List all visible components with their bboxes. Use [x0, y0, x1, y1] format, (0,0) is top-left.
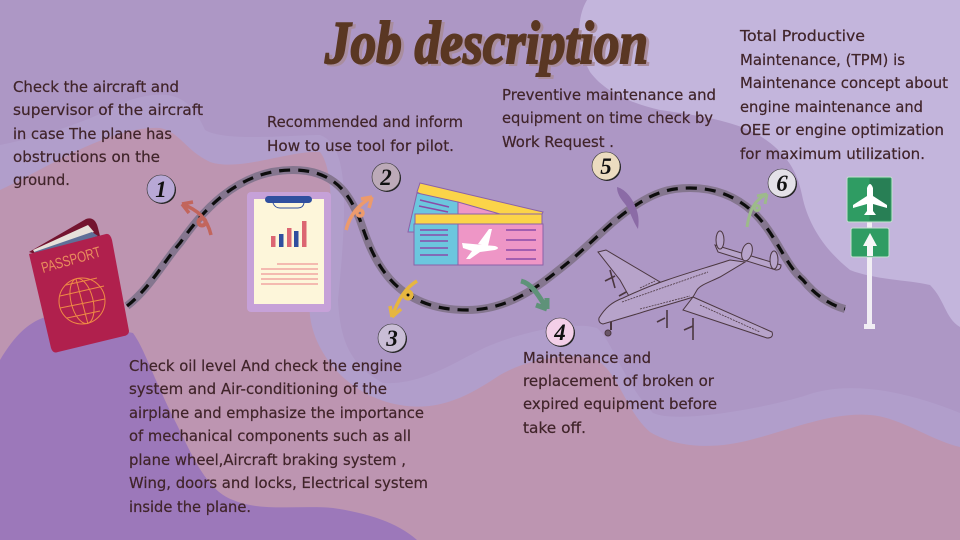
icon: passport: PASSPORT — [39, 244, 103, 277]
step badge 5 — [592, 152, 621, 181]
text: step 3: plane wheel,Aircraft braking system , — [129, 451, 406, 469]
step badge 3 — [378, 324, 407, 353]
arrow 4 — [521, 281, 547, 309]
text: step 3: Check oil level And check the engine — [129, 357, 402, 375]
text: step 4: expired equipment before — [523, 395, 717, 413]
text: step 1: obstructions on the — [13, 148, 160, 166]
step badge 3: 3 — [385, 326, 398, 351]
title: Job description — [324, 10, 648, 76]
step badge 1: 1 — [155, 177, 167, 202]
text: step 1: ground. — [13, 171, 70, 189]
step badge 2: 2 — [379, 165, 392, 190]
text: step 6 — [739, 27, 948, 163]
text: step 2 — [267, 113, 463, 155]
bar chart — [271, 221, 306, 247]
step badge 4 — [546, 318, 575, 347]
step badge 1 — [147, 175, 176, 204]
text: step 6: Maintenance concept about — [740, 74, 948, 92]
step badge 5: 5 — [600, 154, 612, 179]
step badge 4: 4 — [553, 320, 566, 345]
icon: clipboard chart — [247, 192, 331, 312]
icon: passport — [29, 218, 129, 352]
text: step 5: Preventive maintenance and — [502, 86, 716, 104]
text: step 1: Check the aircraft and — [13, 78, 179, 96]
step badge 2 — [372, 163, 401, 192]
icon: boarding tickets — [408, 183, 543, 265]
text: step 3: system and Air-conditioning of the — [129, 380, 387, 398]
text: step 2: How to use tool for pilot. — [267, 137, 454, 155]
title: Job description — [327, 12, 651, 78]
step badge 6 — [768, 169, 797, 198]
text: step 6: Total Productive — [739, 27, 865, 45]
arrow 3 — [390, 281, 417, 317]
text: step 4: take off. — [523, 419, 586, 437]
text: step 5: Work Request . — [502, 133, 614, 151]
arrow 5 — [617, 187, 639, 229]
text: step 4: replacement of broken or — [523, 372, 715, 390]
text: step 6: for maximum utilization. — [740, 145, 925, 163]
text: step 6: OEE or engine optimization — [740, 121, 944, 139]
text: step 3: inside the plane. — [129, 498, 251, 516]
text: step 1: in case The plane has — [13, 125, 172, 143]
step badge 6: 6 — [776, 171, 788, 196]
text: step 6: engine maintenance and — [740, 98, 923, 116]
text: step 1: supervisor of the aircraft — [13, 101, 203, 119]
text: step 5: equipment on time check by — [502, 109, 713, 127]
dashed route — [127, 170, 845, 310]
arrow 1 — [182, 202, 211, 235]
text: step 3: Wing, doors and locks, Electrical system — [129, 474, 428, 492]
arrow 2 — [346, 197, 372, 230]
text: step 3: of mechanical components such as all — [129, 427, 411, 445]
text: step 3 — [129, 357, 428, 516]
text: step 4: Maintenance and — [523, 349, 651, 367]
text: step 2: Recommended and inform — [267, 113, 463, 131]
icon: airplane — [598, 231, 781, 340]
text: step 6: Maintenance, (TPM) is — [740, 51, 905, 69]
arrow 6 — [747, 194, 767, 227]
text: step 4 — [523, 349, 717, 437]
text: step 1 — [13, 78, 203, 189]
text: step 5 — [502, 86, 716, 151]
icon: airport road signs — [847, 177, 892, 329]
text: step 3: airplane and emphasize the importance — [129, 404, 424, 422]
